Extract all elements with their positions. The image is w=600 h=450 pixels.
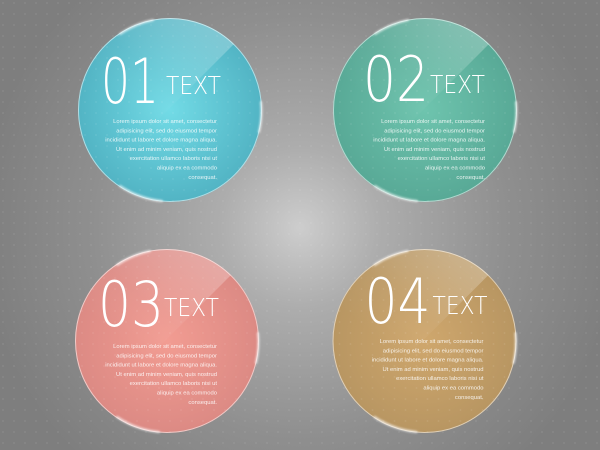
number: 04 <box>364 265 430 338</box>
panel: 04 tan circle <box>332 249 516 433</box>
label: TEXT <box>432 291 488 320</box>
body text <box>373 119 485 181</box>
body text: exercitation ullamco laboris nisi ut <box>398 156 485 162</box>
body text <box>105 344 217 406</box>
body text: adipisicing elit, sed do eiusmod tempor <box>116 128 217 134</box>
body text: incididunt ut labore et dolore magna aliqua. <box>105 363 217 369</box>
body text: Ut enim ad minim veniam, quis nostrud <box>116 147 217 153</box>
glass disc <box>78 18 262 202</box>
body text: Ut enim ad minim veniam, quis nostrud <box>384 147 485 153</box>
glass disc <box>333 18 517 202</box>
body text: consequat. <box>455 395 484 401</box>
glass disc <box>332 249 516 433</box>
body text: adipisicing elit, sed do eiusmod tempor <box>383 348 484 354</box>
body text: Ut enim ad minim veniam, quis nostrud <box>382 367 484 373</box>
body text: adipisicing elit, sed do eiusmod tempor <box>116 353 217 359</box>
label: TEXT <box>166 71 221 100</box>
label: TEXT <box>164 293 219 322</box>
number: 03 <box>98 268 164 341</box>
body text: Lorem ipsum dolor sit amet, consectetur <box>113 344 217 350</box>
body text: incididunt ut labore et dolore magna aliqua. <box>105 138 217 144</box>
body text: Lorem ipsum dolor sit amet, consectetur <box>113 119 217 125</box>
body text: exercitation ullamco laboris nisi ut <box>130 156 217 162</box>
body text: incididunt ut labore et dolore magna aliqua. <box>372 358 484 364</box>
panel: 03 coral circle <box>75 249 259 433</box>
panel: 01 teal circle <box>78 18 262 202</box>
body text <box>105 119 217 181</box>
glass disc <box>75 249 259 433</box>
body text: aliquip ex ea commodo <box>423 386 484 392</box>
body text: Lorem ipsum dolor sit amet, consectetur <box>381 119 485 125</box>
panel: 02 green circle <box>333 18 517 202</box>
body text: consequat. <box>188 175 217 181</box>
body text: incididunt ut labore et dolore magna aliqua. <box>373 138 485 144</box>
body text: Lorem ipsum dolor sit amet, consectetur <box>380 339 484 345</box>
body text: consequat. <box>456 175 485 181</box>
body text <box>372 339 484 401</box>
label: TEXT <box>430 70 485 99</box>
body text: exercitation ullamco laboris nisi ut <box>396 376 484 382</box>
body text: exercitation ullamco laboris nisi ut <box>130 381 217 387</box>
body text: aliquip ex ea commodo <box>157 390 217 396</box>
body text: aliquip ex ea commodo <box>425 166 485 172</box>
body text: adipisicing elit, sed do eiusmod tempor <box>384 128 485 134</box>
body text: aliquip ex ea commodo <box>157 166 217 172</box>
number: 02 <box>363 43 429 116</box>
number: 01 <box>101 45 159 118</box>
body text: consequat. <box>188 400 217 406</box>
body text: Ut enim ad minim veniam, quis nostrud <box>116 372 217 378</box>
